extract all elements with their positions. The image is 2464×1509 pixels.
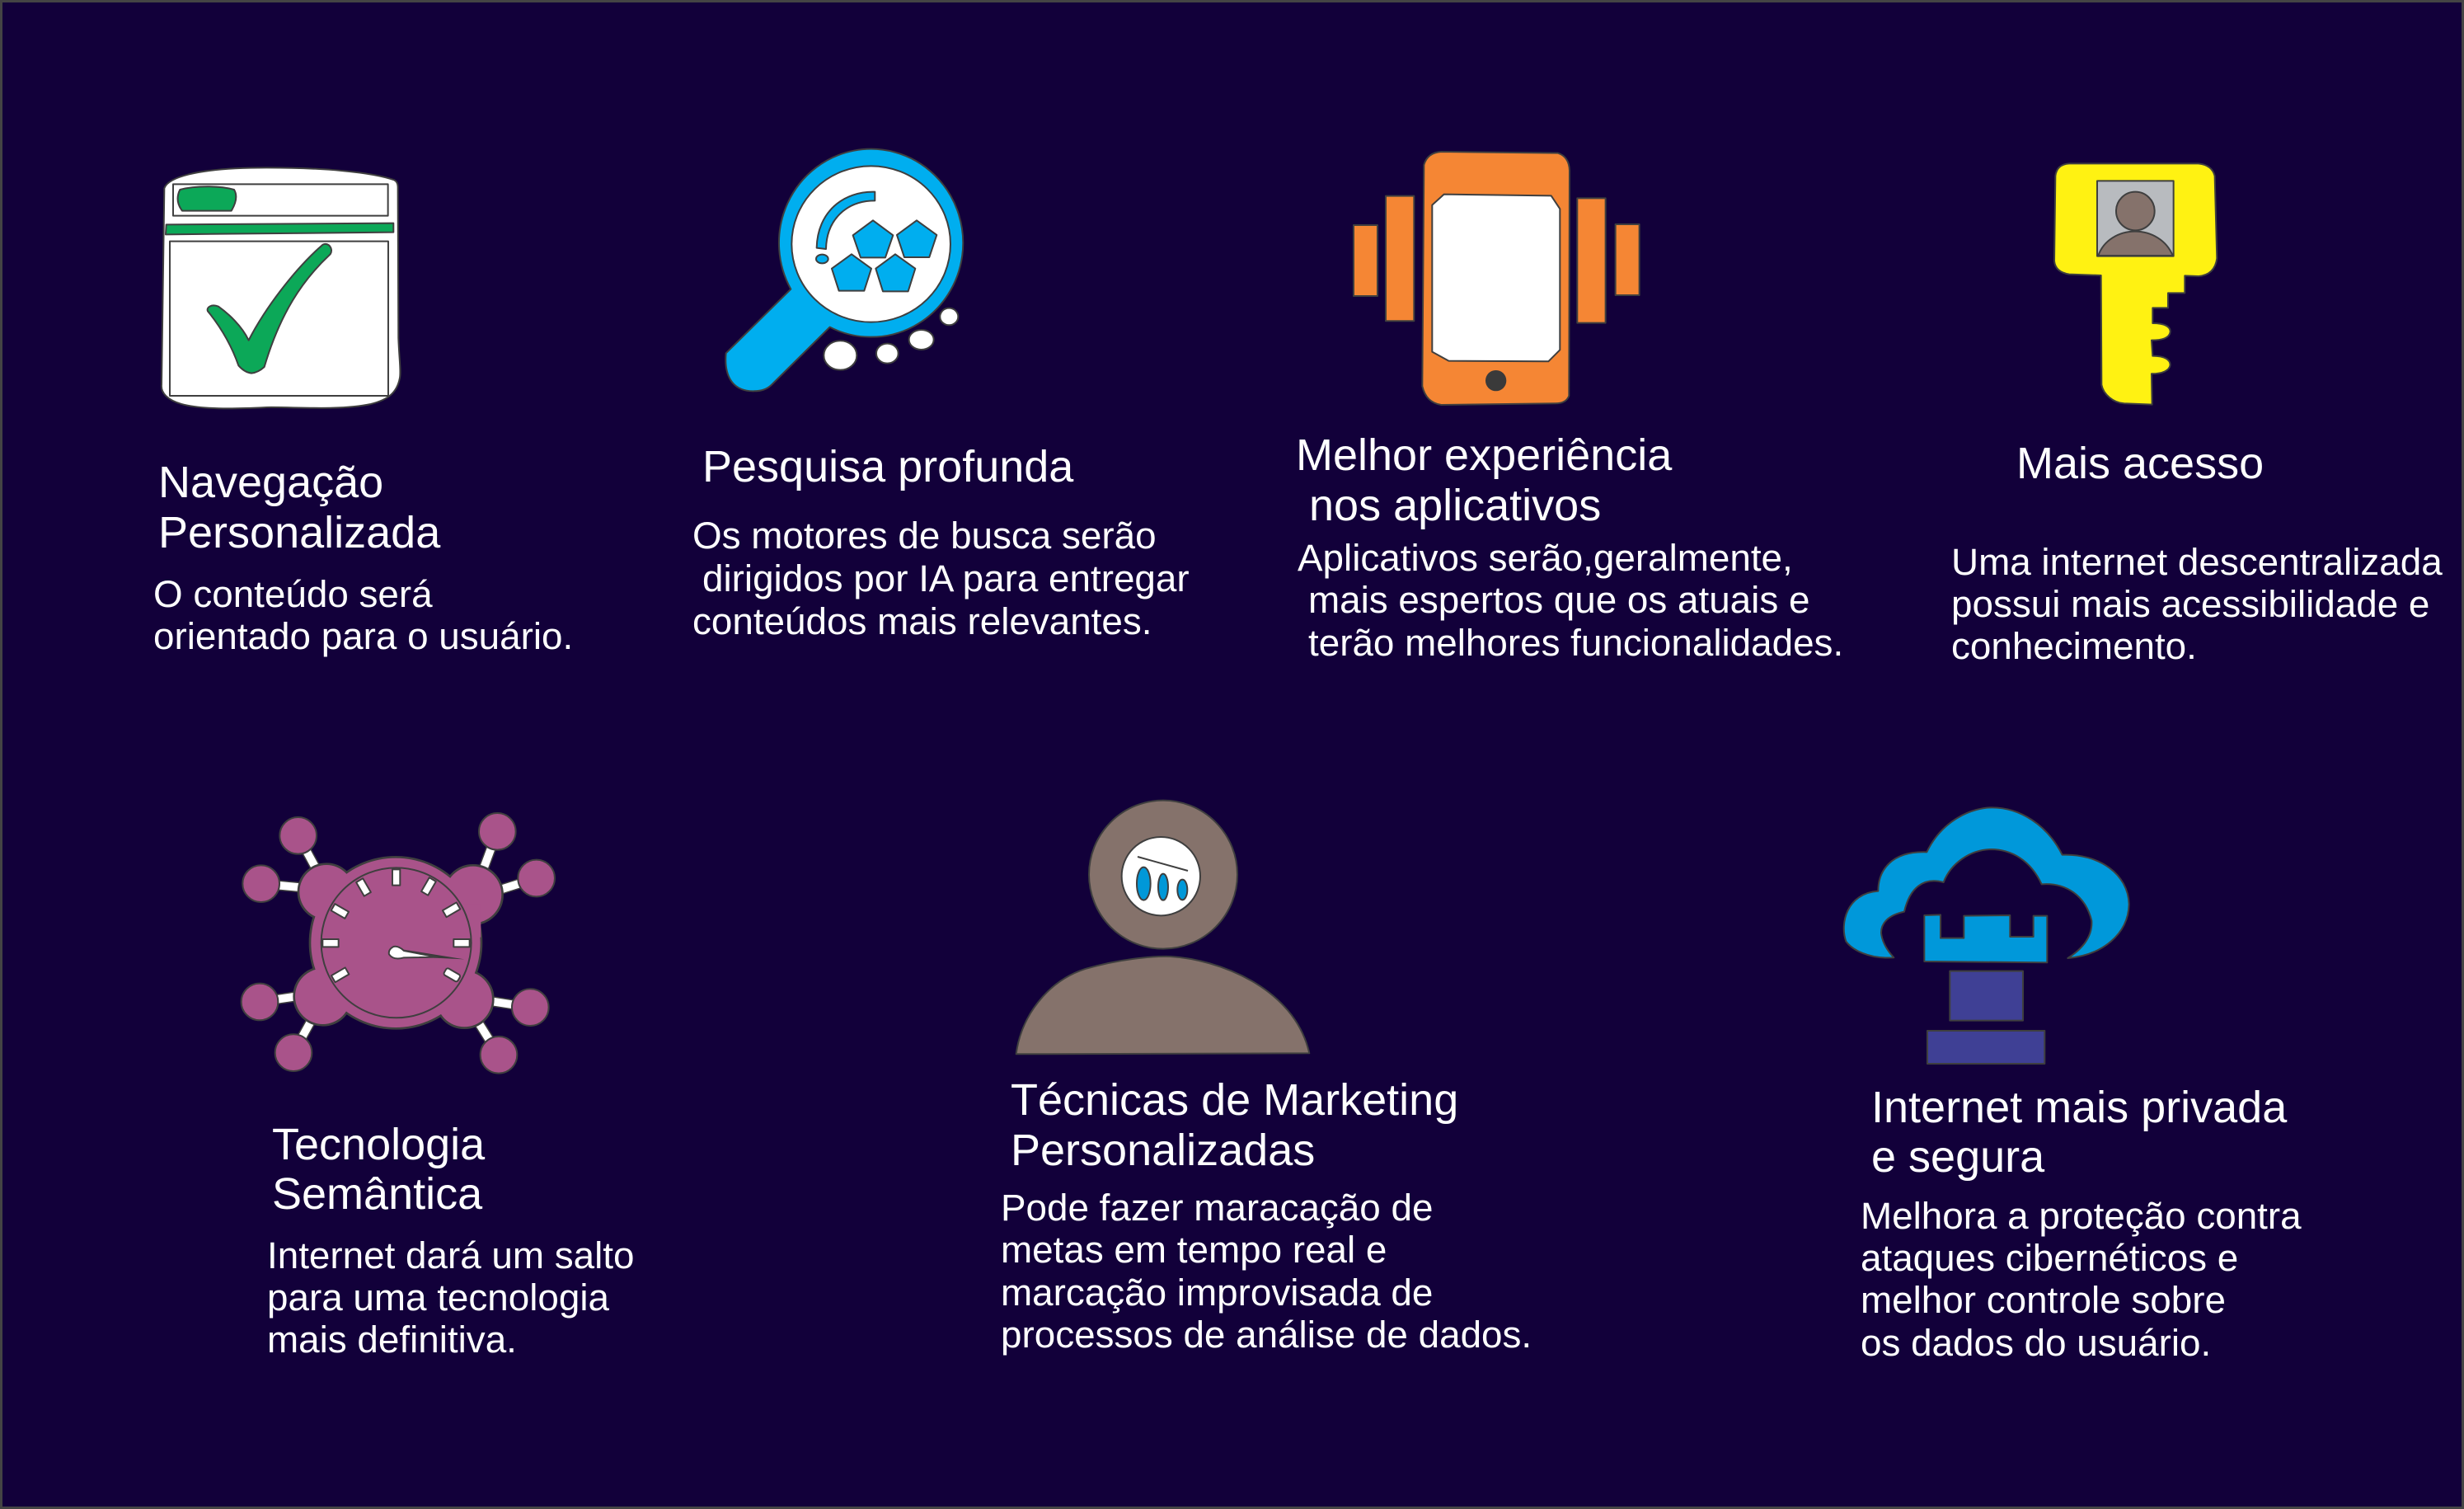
heading: e segura: [1871, 1132, 2045, 1182]
icon: vibrating smartphone: [1354, 152, 1640, 405]
icon: browser window with check mark: [162, 167, 401, 408]
body text: terão melhores funcionalidades.: [1308, 622, 1843, 664]
body text: O conteúdo será: [153, 573, 433, 615]
body text: para uma tecnologia: [267, 1276, 610, 1319]
heading: Navegação: [158, 458, 383, 507]
heading: Personalizada: [158, 508, 441, 557]
heading: Melhor experiência: [1296, 430, 1673, 480]
body text: possui mais acessibilidade e: [1951, 583, 2429, 625]
body text: orientado para o usuário.: [153, 615, 573, 657]
heading: Pesquisa profunda: [702, 442, 1074, 491]
body text: Melhora a proteção contra: [1861, 1195, 2302, 1237]
heading: Personalizadas: [1011, 1126, 1315, 1175]
body text: mais espertos que os atuais e: [1308, 579, 1809, 621]
icon: cloud and castle tower: [1844, 807, 2129, 1064]
heading: Internet mais privada: [1871, 1083, 2288, 1132]
panel: Técnicas de Marketing Personalizadas: [1001, 801, 1532, 1356]
heading: nos aplicativos: [1309, 481, 1601, 530]
body text: processos de análise de dados.: [1001, 1314, 1532, 1356]
panel: Mais acesso: [1951, 163, 2443, 667]
heading: Tecnologia: [272, 1120, 486, 1169]
body text: Uma internet descentralizada: [1951, 541, 2443, 583]
body text: mais definitiva.: [267, 1319, 517, 1361]
panel: Pesquisa profunda: [692, 149, 1190, 642]
body text: Aplicativos serão,geralmente,: [1298, 537, 1793, 579]
body text: metas em tempo real e: [1001, 1229, 1387, 1271]
icon: speedometer with nodes: [242, 813, 555, 1074]
panel: Internet mais privada e segura: [1844, 807, 2302, 1364]
body text: Internet dará um salto: [267, 1234, 635, 1276]
heading: Semântica: [272, 1169, 483, 1219]
icon: person with data circle: [1016, 801, 1309, 1054]
heading: Mais acesso: [2016, 439, 2264, 488]
body text: ataques cibernéticos e: [1861, 1237, 2238, 1279]
body text: Pode fazer maracação de: [1001, 1187, 1433, 1229]
body text: marcação improvisada de: [1001, 1272, 1433, 1314]
panel: Navegação Personalizada: [153, 167, 573, 657]
panel: Tecnologia Semântica: [242, 813, 635, 1361]
icon: yellow key with user photo: [2054, 163, 2217, 405]
body text: dirigidos por IA para entregar: [702, 557, 1190, 599]
body text: os dados do usuário.: [1861, 1322, 2211, 1364]
panel: Melhor experiência nos aplicativos: [1296, 152, 1843, 664]
body text: Os motores de busca serão: [692, 515, 1157, 557]
heading: Técnicas de Marketing: [1011, 1075, 1458, 1125]
body text: conhecimento.: [1951, 625, 2197, 667]
body text: conteúdos mais relevantes.: [692, 600, 1152, 642]
icon: magnifying glass: [725, 149, 963, 391]
body text: melhor controle sobre: [1861, 1279, 2226, 1321]
